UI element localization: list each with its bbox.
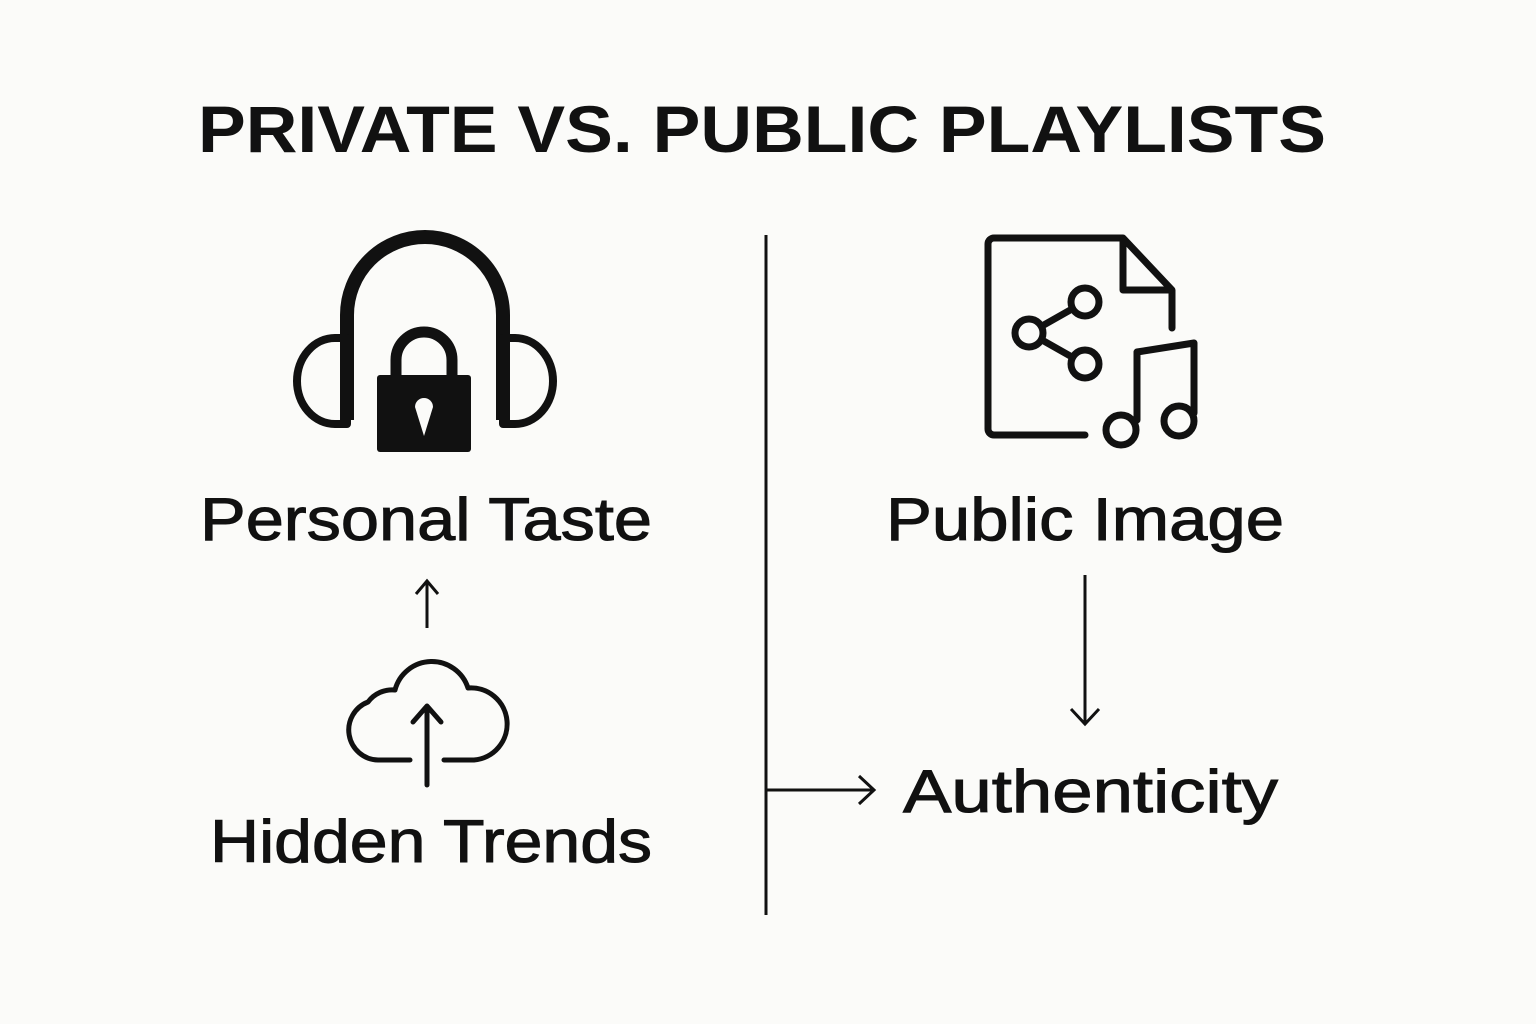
title: PRIVATE VS. PUBLIC PLAYLISTS — [198, 92, 1326, 166]
arrow: up — [416, 581, 438, 628]
icon: cloud upload — [349, 662, 507, 785]
text: Hidden Trends: Hidden Trends — [210, 808, 652, 875]
divider line — [764, 235, 768, 915]
arrow: down — [1071, 575, 1099, 724]
text: Public Image: Public Image — [886, 486, 1284, 553]
text: Personal Taste: Personal Taste — [200, 486, 652, 553]
icon: document with share and music — [988, 238, 1194, 445]
arrow: divider to authenticity — [766, 776, 874, 804]
icon: headphones with lock — [297, 237, 553, 452]
text: Authenticity: Authenticity — [903, 758, 1278, 825]
